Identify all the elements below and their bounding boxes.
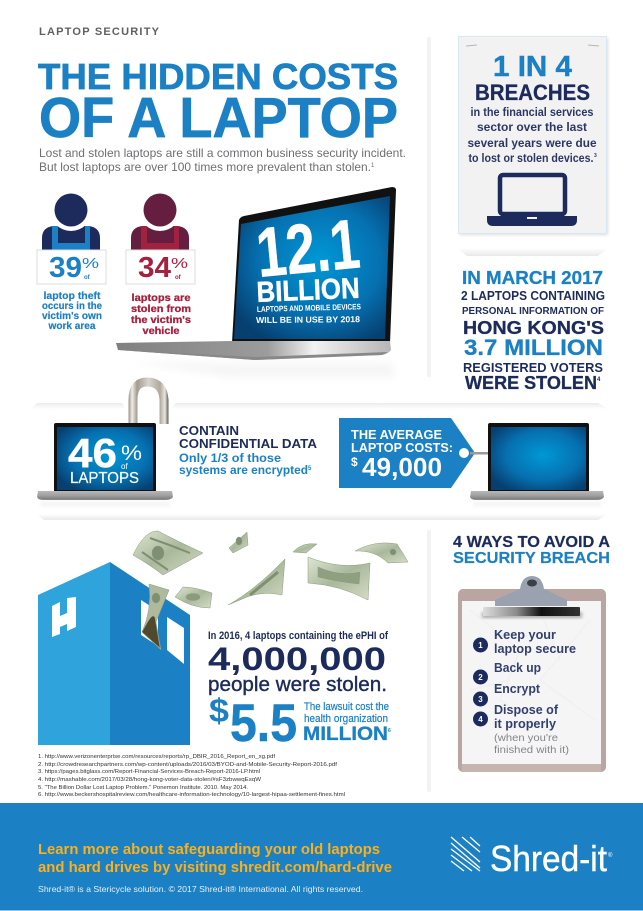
callout: March 2017 voters: 2 LAPTOPS CONTAINING — [461, 288, 605, 303]
references: 3. https://pages.bitglass.com/Report-Financial-Services-Breach-Report-2016-LP.html — [38, 769, 260, 775]
stat: 39% person: % — [82, 255, 99, 272]
callout: March 2017 voters: WERE STOLEN — [465, 373, 597, 393]
stat: 34% person: vehicle — [142, 325, 180, 337]
callout: March 2017 voters: HONG KONG'S — [463, 318, 604, 338]
stat: 39% person: laptop theft — [44, 290, 101, 302]
hospital building — [38, 562, 190, 745]
clipboard checklist — [458, 576, 606, 772]
text: confidential data: CONTAIN — [179, 423, 239, 438]
laptop: 46% — [37, 423, 173, 507]
footer band — [0, 803, 643, 911]
Shred-it logo: Shred-it — [490, 838, 607, 879]
intro text: But lost laptops are over 100 times more prevalent than stolen. — [39, 160, 371, 174]
callout: March 2017 voters: PERSONAL INFORMATION OF — [462, 305, 605, 317]
stat: 39% person: 39 — [49, 252, 82, 284]
references: 5. "The Billion Dollar Lost Laptop Problem." Ponemon Institute. 2010. May 2014. — [38, 785, 248, 791]
card: 1 in 4 breaches: several years were due — [468, 138, 596, 150]
big laptop: 12.1 billion: BILLION — [256, 273, 360, 309]
references: 1. http://www.verizonenterprise.com/resources/reports/rp_DBIR_2016_Report_en_xg.pdf — [38, 754, 275, 760]
text: $5.5 million lawsuit: 6 — [388, 728, 391, 734]
icon: laptop outline — [487, 175, 577, 226]
checklist text: finished with it) — [494, 744, 569, 756]
text: confidential data — [179, 423, 318, 477]
text: $5.5 million lawsuit: The lawsuit cost the — [304, 701, 389, 713]
checklist text: Keep your — [494, 628, 556, 642]
heading: 4 ways — [453, 534, 610, 567]
eyebrow: laptop security: LAPTOP SECURITY — [39, 26, 160, 38]
card: 1 in 4 breaches: 3 — [594, 153, 597, 159]
checklist text: (when you're — [494, 732, 558, 744]
stat: 39% person — [37, 189, 106, 332]
price tag: average laptop cost: $ — [351, 455, 358, 469]
laptop: blank screen — [470, 423, 604, 507]
Shred-it logo: ® — [608, 852, 613, 859]
stat: 34% person: the victim's — [131, 314, 191, 326]
checklist text: Dispose of — [494, 703, 559, 717]
stat: 34% person: 34 — [138, 252, 171, 284]
laptop: 46%: % — [121, 442, 142, 465]
text: $5.5 million lawsuit: $ — [209, 692, 229, 729]
checklist text — [494, 628, 576, 756]
card: 1 in 4 breaches: 1 IN 4 — [493, 51, 572, 83]
text: $5.5 million lawsuit: MILLION — [303, 724, 388, 745]
callout: March 2017 voters — [461, 267, 605, 393]
intro text: 1 — [371, 163, 375, 169]
text: ePHI stolen: In 2016, 4 laptops containing the ePHI of — [208, 630, 388, 642]
stat: 39% person: of — [84, 275, 91, 281]
stat: 34% person: laptops are — [132, 292, 191, 304]
padlock shackle — [133, 382, 164, 424]
text: confidential data: CONFIDENTIAL DATA — [179, 436, 318, 451]
title: THE HIDDEN COSTS — [38, 56, 398, 97]
text: ePHI stolen — [208, 630, 388, 696]
laptop: 46%: 46 — [68, 430, 117, 476]
heading: 4 ways: 4 WAYS TO AVOID A — [453, 534, 610, 551]
card: 1 in 4 breaches: BREACHES — [475, 80, 590, 105]
text: $5.5 million lawsuit — [209, 692, 391, 753]
section dividers — [30, 37, 608, 792]
checklist text: Back up — [494, 661, 541, 675]
title: OF A LAPTOP — [39, 86, 398, 150]
text: ePHI stolen: 4,000,000 — [208, 641, 386, 677]
checklist text: it properly — [494, 717, 556, 731]
references — [38, 754, 345, 798]
stat: 34% person: stolen from — [131, 303, 191, 315]
heading: 4 ways: SECURITY BREACH — [453, 550, 610, 567]
footer copyright: Shred-it® is a Stericycle solution. © 2017 Shred-it® International. All rights reserved. — [38, 884, 363, 894]
checklist numbers: 3 — [478, 695, 483, 704]
big laptop: 12.1 billion: WILL BE IN USE BY 2018 — [256, 314, 360, 325]
text: confidential data: 5 — [308, 466, 312, 472]
flying money — [133, 531, 408, 650]
text: confidential data: systems are encrypted — [179, 465, 308, 477]
checklist numbers: 2 — [478, 673, 483, 682]
stat: 39% person: work area — [48, 320, 96, 332]
footer call to action: and hard drives by visiting shredit.com/hard-drive — [38, 859, 392, 876]
callout: March 2017 voters: REGISTERED VOTERS — [463, 361, 603, 375]
callout: March 2017 voters: 4 — [597, 377, 601, 383]
price tag: average laptop cost — [339, 418, 488, 488]
references: 2. http://crowdresearchpartners.com/wp-content/uploads/2016/03/BYOD-and-Mobile-Security-Report-2016.pdf — [38, 762, 337, 768]
big laptop: 12.1 billion: LAPTOPS AND MOBILE DEVICES — [257, 302, 362, 314]
price tag: average laptop cost: THE AVERAGE — [351, 428, 442, 442]
laptop: 46%: LAPTOPS — [70, 470, 139, 487]
references: 4. http://mashable.com/2017/03/28/hong-kong-voter-data-stolen/#sF3zbwwqEsqW — [38, 777, 262, 783]
text: $5.5 million lawsuit: 5.5 — [230, 694, 297, 753]
checklist numbers: 4 — [478, 715, 483, 724]
price tag: average laptop cost: LAPTOP COSTS: — [351, 441, 453, 455]
stat: 34% person: of — [175, 275, 182, 281]
stat: 39% person: occurs in the — [42, 300, 102, 312]
price tag: average laptop cost: 49,000 — [362, 452, 442, 482]
card: 1 in 4 breaches: in the financial services — [470, 107, 594, 119]
text: ePHI stolen: people were stolen. — [208, 674, 387, 696]
text: confidential data: Only 1/3 of those — [179, 453, 281, 465]
stat: 39% person: victim's own — [42, 310, 102, 322]
big laptop: 12.1 billion — [116, 187, 396, 378]
clip — [483, 576, 580, 616]
stat: 34% person — [126, 189, 195, 337]
callout: March 2017 voters: 3.7 MILLION — [464, 335, 603, 360]
text: $5.5 million lawsuit: health organization — [304, 713, 388, 725]
checklist numbers — [473, 638, 488, 726]
references: 6. http://www.beckershospitalreview.com/healthcare-information-technology/10-largest-hipaa-settlement-fines.html — [38, 792, 345, 798]
big laptop: 12.1 billion: 12.1 — [253, 204, 363, 292]
card: 1 in 4 breaches: sector over the last — [477, 122, 587, 134]
stat: 34% person: % — [171, 255, 188, 272]
checklist text: Encrypt — [494, 682, 541, 696]
checklist text: laptop secure — [494, 642, 576, 656]
footer call to action: Learn more about safeguarding your old laptops — [38, 841, 380, 858]
intro text — [39, 146, 406, 174]
checklist numbers: 1 — [478, 641, 483, 650]
callout: March 2017 voters: IN MARCH 2017 — [462, 267, 603, 288]
title — [38, 56, 398, 150]
card: 1 in 4 breaches: to lost or stolen devices. — [468, 153, 594, 165]
laptop: 46%: of — [121, 462, 128, 471]
intro text: Lost and stolen laptops are still a common business security incident. — [39, 146, 406, 160]
card: 1 in 4 breaches — [458, 36, 608, 235]
footer call to action — [38, 841, 392, 876]
